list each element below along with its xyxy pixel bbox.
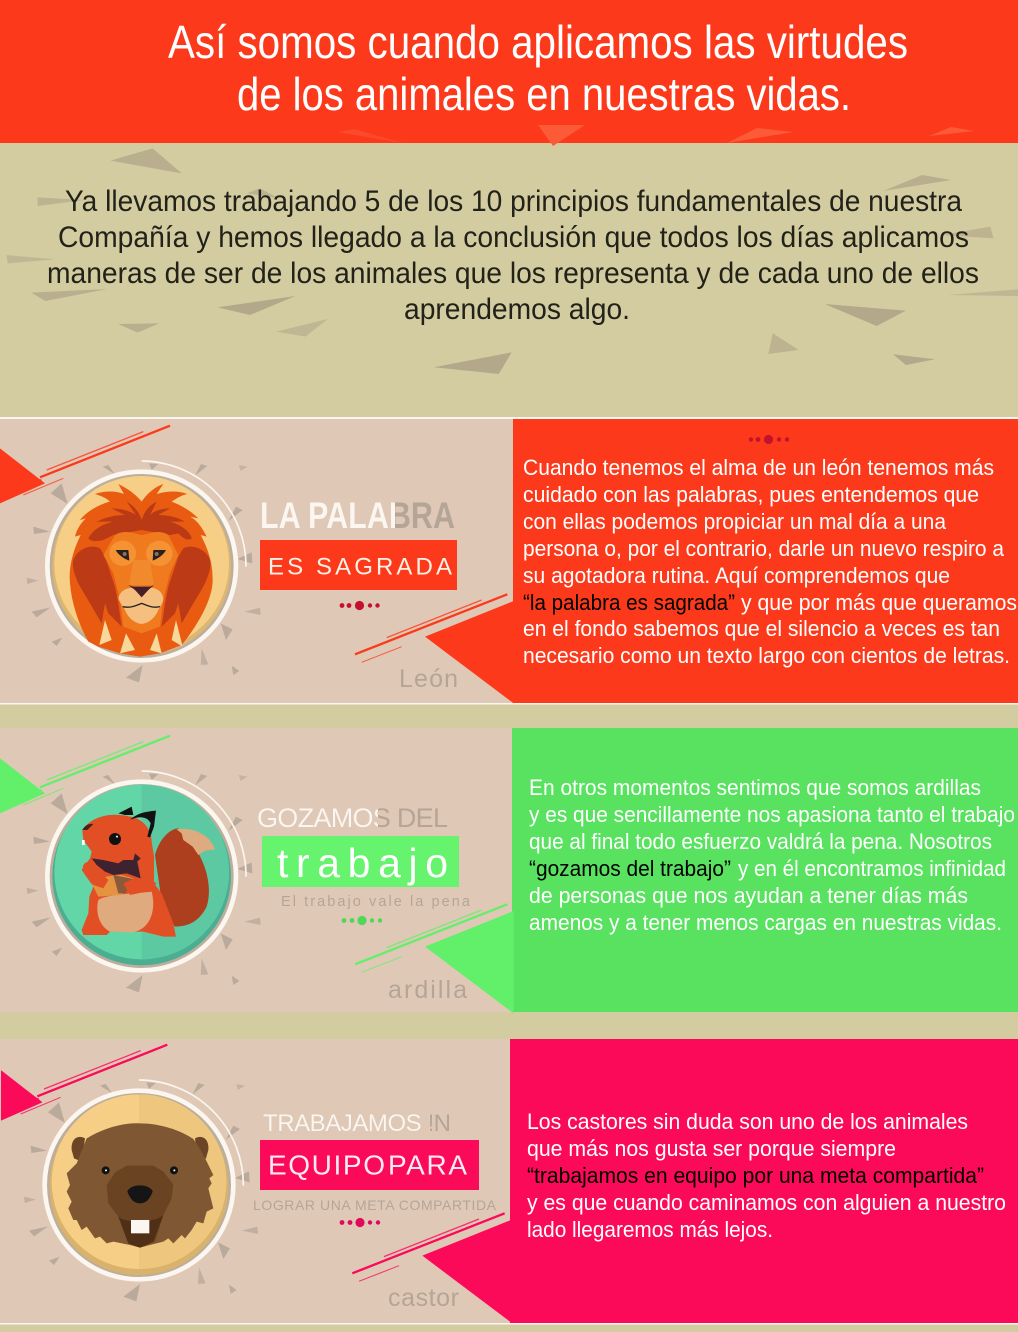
banner: equipo para: EQUIPO PARA: [268, 1150, 467, 1180]
banner: es sagrada: [260, 540, 457, 590]
heading: la palabra: [262, 502, 454, 528]
heading: gozamos del: [258, 808, 448, 828]
text block: león: en el fondo sabemos que el silencio a veces es tan: [523, 616, 1000, 641]
label: ardilla: ardilla: [388, 976, 467, 1004]
title: [168, 16, 908, 120]
panel: león: [0, 417, 1018, 704]
panel: ardilla: [0, 728, 1018, 1013]
text block: castor: lado llegaremos más lejos.: [527, 1217, 773, 1242]
heading: la palabra: LA PALABRA: [260, 495, 455, 536]
intro panel: [6, 148, 1018, 374]
label: castor: castor: [388, 1284, 459, 1312]
text block: ardilla: [529, 775, 1015, 935]
intro text: Ya llevamos trabajando 5 de los 10 principios fundamentales de nuestra: [65, 185, 962, 218]
text block: castor: “trabajamos en equipo por una meta compartida”: [527, 1163, 984, 1188]
text block: león: con ellas podemos propiciar un mal día a una: [523, 509, 947, 534]
heading: gozamos del: GOZAMOS DEL: [257, 803, 448, 833]
text block: león: necesario como un texto largo con cientos de letras.: [523, 643, 1010, 668]
title: de los animales en nuestras vidas.: [237, 68, 851, 120]
text block: león: cuidado con las palabras, pues entendemos que: [523, 482, 979, 507]
text block: ardilla: que al final todo esfuerzo valdrá la pena. Nosotros: [529, 829, 992, 854]
dots: top of text: [749, 435, 789, 444]
heading: trabajamos en: [264, 1114, 449, 1131]
text block: ardilla: de personas que nos ayudan a tener días más: [529, 883, 968, 908]
text block: león: persona o, por el contrario, darle un nuevo respiro a: [523, 536, 1005, 561]
header banner: [0, 0, 1018, 146]
text block: castor: [527, 1109, 1006, 1242]
text block: león: “la palabra es sagrada”: [523, 590, 735, 615]
intro text: Compañía y hemos llegado a la conclusión que todos los días aplicamos: [58, 221, 969, 254]
subtitle: El trabajo vale la pena: [281, 894, 471, 910]
text block: ardilla: amenos y a tener menos cargas en nuestras vidas.: [529, 910, 1002, 935]
text block: castor: y es que cuando caminamos con alguien a nuestro: [527, 1190, 1006, 1215]
banner: equipo para: [260, 1140, 479, 1190]
intro text: [47, 185, 979, 326]
heading: gozamos del: GOZAMOS DEL: [257, 803, 448, 833]
dots: [340, 1218, 380, 1227]
heading: la palabra: LA PALABRA: [260, 495, 455, 536]
label: león: León: [399, 665, 458, 693]
heading: trabajamos en: TRABAJAMOS !N: [263, 1110, 451, 1137]
text block: ardilla: y en él encontramos infinidad: [738, 856, 1006, 881]
text block: león: Cuando tenemos el alma de un león tenemos más: [523, 455, 994, 480]
text block: león: [523, 455, 1017, 668]
text block: castor: que más nos gusta ser porque siempre: [527, 1136, 896, 1161]
icon: beaver: [50, 1094, 228, 1275]
dots: [342, 916, 382, 925]
icon: squirrel: [52, 785, 231, 965]
banner: trabajo: trabajo: [277, 840, 448, 886]
text block: ardilla: En otros momentos sentimos que somos ardillas: [529, 775, 981, 800]
banner: es sagrada: ES SAGRADA: [268, 554, 452, 580]
text block: león: su agotadora rutina. Aquí comprendemos que: [523, 563, 950, 588]
intro text: aprendemos algo.: [404, 293, 630, 326]
icon: lion: [52, 476, 231, 657]
subtitle: LOGRAR UNA META COMPARTIDA: [253, 1197, 497, 1213]
intro text: maneras de ser de los animales que los representa y de cada uno de ellos: [47, 257, 979, 290]
title: Así somos cuando aplicamos las virtudes: [168, 16, 908, 68]
text block: castor: Los castores sin duda son uno de los animales: [527, 1109, 968, 1134]
heading: trabajamos en: TRABAJAMOS !N: [263, 1110, 451, 1137]
dots: [340, 601, 380, 610]
panel: castor: [0, 1039, 1018, 1324]
text block: ardilla: “gozamos del trabajo”: [529, 856, 731, 881]
